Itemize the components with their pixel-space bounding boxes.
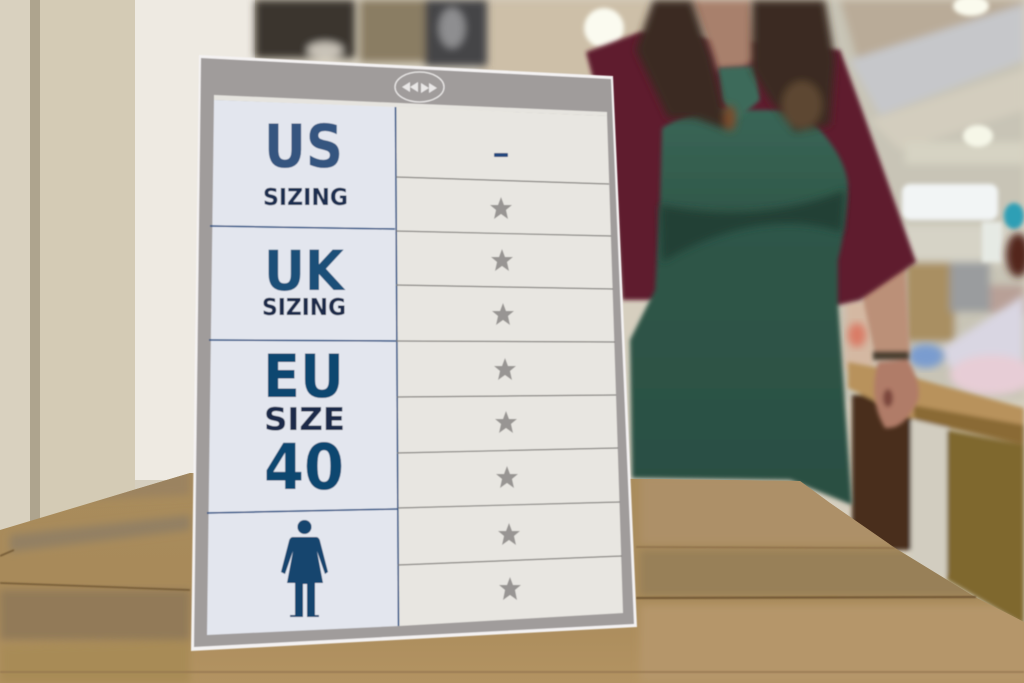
background shopper at right bbox=[940, 233, 1024, 395]
background: store ceiling and right side bbox=[480, 0, 1024, 400]
left label panel bbox=[207, 100, 399, 635]
arm bbox=[860, 258, 919, 428]
background: hanging clothes bbox=[255, 0, 487, 66]
cardigan bbox=[586, 32, 916, 305]
blue glove bbox=[908, 344, 944, 368]
plank bands bbox=[0, 470, 1024, 683]
right wooden display table bbox=[848, 362, 1024, 625]
teal sign spot bbox=[1004, 203, 1024, 229]
woman in green dress and burgundy cardigan bbox=[586, 0, 919, 505]
sizing sign bbox=[191, 55, 637, 651]
label: SIZING: SIZING bbox=[263, 185, 348, 211]
icon: woman pictogram bbox=[281, 520, 328, 617]
neck bbox=[690, 0, 757, 70]
heading: 40: 40 bbox=[264, 431, 344, 504]
rating: dash bbox=[494, 153, 508, 157]
dress shading bbox=[660, 190, 845, 262]
plank seams bbox=[0, 547, 1024, 672]
gray frame bbox=[194, 58, 634, 647]
hair bbox=[636, 0, 835, 132]
coral spot behind arm bbox=[848, 323, 866, 347]
logo oval bbox=[395, 72, 444, 102]
neckline bbox=[718, 66, 760, 122]
dress bbox=[630, 110, 852, 505]
panel dividers bbox=[207, 107, 398, 626]
heading: UK: UK bbox=[264, 239, 346, 303]
sign border bbox=[191, 55, 637, 651]
top strip bbox=[214, 95, 607, 116]
heading: US: US bbox=[264, 112, 343, 182]
heading: EU: EU bbox=[263, 342, 344, 412]
wooden table top bbox=[0, 470, 1024, 683]
rating stars bbox=[490, 197, 521, 600]
label: SIZING: SIZING bbox=[262, 295, 346, 321]
label: SIZE: SIZE bbox=[264, 402, 345, 438]
ceiling lights bbox=[584, 0, 1002, 262]
right rating panel bbox=[396, 107, 623, 626]
row lines bbox=[396, 177, 622, 565]
